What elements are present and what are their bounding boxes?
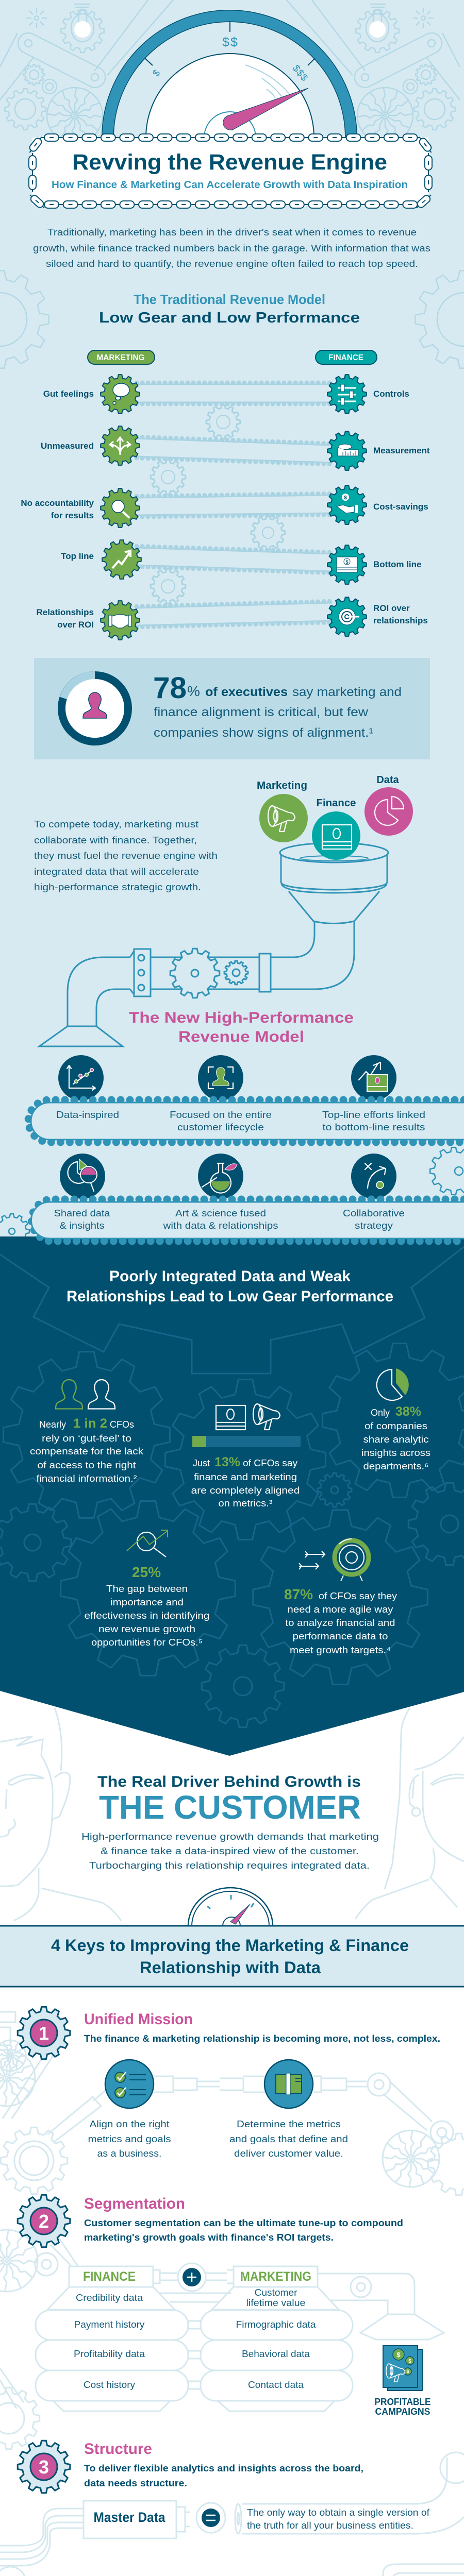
key 1: unified mission (18, 2007, 440, 2059)
icon: profitable campaigns (374, 2346, 431, 2417)
donut chart (62, 675, 128, 742)
dark section background (0, 1236, 464, 1756)
decorative gear: right edge (415, 270, 464, 368)
icon: gear target (327, 597, 367, 636)
key 2: segmentation: 2 (39, 2211, 49, 2232)
icon: customer lifecycle (198, 1055, 243, 1100)
decorative face: right (355, 1708, 464, 1919)
stat: 25% gap: new revenue growth (98, 1624, 195, 1634)
heading: the customer: The Real Driver Behind Growth is (97, 1773, 361, 1790)
icon: gear growth arrow (102, 540, 141, 579)
stat text: finance alignment is critical, but few (154, 705, 369, 719)
icon: gear tape measure (327, 431, 367, 470)
intro paragraph: growth, while finance tracked numbers back in the garage. With information that was (33, 243, 430, 253)
row labels: finance side: Cost-savings (373, 502, 428, 512)
row labels: marketing side: No accountability (21, 498, 94, 508)
stat: 1 in 2 CFOs: rely on ‘gut-feel’ to (42, 1433, 131, 1444)
row labels: finance side: Measurement (373, 446, 430, 455)
stat: 87% agile: meet growth targets.⁴ (290, 1645, 391, 1655)
row labels: finance side: Controls (373, 389, 409, 399)
row labels: finance side: ROI over (373, 603, 410, 613)
stat: 87% agile: of CFOs say they (319, 1591, 397, 1601)
icon: profitable campaigns: $ (396, 2351, 401, 2359)
conveyor 2 labels: with data & relationships (162, 1221, 278, 1231)
dark section heading: Relationships Lead to Low Gear Performance (67, 1288, 393, 1305)
title: Revving the Revenue Engine (72, 150, 387, 175)
finance column: Credibility data (76, 2293, 143, 2303)
icon: art and science (198, 1154, 243, 1199)
stat: 38% share insights: insights across (361, 1448, 430, 1458)
stat: 38% share insights (361, 1368, 430, 1471)
conveyor 1 labels: to bottom-line results (323, 1122, 425, 1132)
stat: 87% agile: need a more agile way (288, 1604, 393, 1615)
background machinery: key 1 (0, 2012, 464, 2483)
stat: 25% gap: 25% (132, 1564, 161, 1580)
marketing column (236, 2269, 317, 2390)
pill: finance (316, 350, 377, 364)
diagram: master data equals truth: the truth for all your business entities. (247, 2520, 413, 2531)
conveyor 1 labels: Top-line efforts linked (322, 1110, 425, 1120)
conveyor 2 labels: Collaborative (343, 1208, 405, 1218)
stat: 1 in 2 CFOs: CFOs (110, 1419, 134, 1430)
diagram: master data equals truth (0, 2458, 464, 2566)
decorative gear left of conveyor (0, 1214, 29, 1249)
icon: gear sliders (327, 375, 367, 414)
customer paragraph: Turbocharging this relationship requires integrated data. (89, 1860, 370, 1871)
finance column: FINANCE (83, 2269, 136, 2284)
stat: 1 in 2 CFOs: of access to the right (37, 1460, 136, 1470)
decorative wheel by key 4 (0, 2567, 26, 2576)
text: align metrics (88, 2119, 171, 2159)
icon: top-line bottom-line (351, 1055, 396, 1100)
intro paragraph (33, 227, 430, 269)
subtitle: How Finance & Marketing Can Accelerate Growth with Data Inspiration (52, 179, 408, 191)
stat: 1 in 2 CFOs: compensate for the lack (30, 1446, 144, 1456)
marketing column: lifetime value (246, 2298, 305, 2308)
conveyor 1 labels (56, 1110, 425, 1132)
key 3: structure: data needs structure. (84, 2478, 187, 2488)
stat: 25% gap: effectiveness in identifying (85, 1611, 209, 1621)
icon: gear hand with coin (327, 485, 367, 524)
small gauge (188, 1888, 273, 1926)
row labels: marketing side (21, 389, 94, 630)
pill: marketing (88, 350, 155, 364)
marketing column: Contact data (248, 2380, 304, 2390)
conveyor 1 labels: Focused on the entire (170, 1110, 272, 1120)
icon: profitable campaigns: $ (408, 2359, 411, 2364)
finance column: Cost history (84, 2380, 135, 2390)
row labels: marketing side: Relationships (37, 607, 94, 617)
row labels: finance side: Bottom line (373, 560, 422, 569)
key 1: unified mission: Unified Mission (84, 2011, 193, 2028)
funnel and pipe (39, 843, 388, 1046)
icon: gear split arrows (101, 426, 140, 465)
icon: gear magnifier (101, 488, 140, 528)
finance column: Profitability data (74, 2349, 145, 2359)
row labels: finance side (373, 389, 430, 625)
icon: finance ball (312, 798, 360, 860)
intro paragraph: Traditionally, marketing has been in the driver's seat when it comes to revenue (47, 227, 417, 238)
diagram: master data equals truth: The only way to obtain a single version of (247, 2507, 430, 2518)
heading: the customer (97, 1773, 361, 1826)
stat: 38% share insights: 38% (395, 1404, 421, 1419)
plus sign (178, 2263, 206, 2291)
icon: profitable campaigns: PROFITABLE (374, 2397, 431, 2407)
marketing column: Behavioral data (242, 2349, 310, 2359)
speedometer gauge: $ (151, 67, 163, 79)
key 2: segmentation: Customer segmentation can be the ultimate tune-up to compound (84, 2218, 403, 2228)
key 2: segmentation: Segmentation (84, 2195, 185, 2212)
panel: 4 keys band: 4 Keys to Improving the Marketing & Finance (51, 1936, 409, 1955)
conveyor 2 labels (54, 1208, 405, 1231)
marketing column: Customer (255, 2287, 297, 2298)
stat text: 78 (153, 671, 187, 705)
key 3: structure: Structure (84, 2441, 152, 2458)
stat: 87% agile (284, 1539, 397, 1655)
dashboard: advanced analytics (279, 2564, 464, 2576)
text: determine metrics: deliver customer value. (234, 2148, 343, 2159)
key 1: unified mission: 1 (39, 2023, 49, 2044)
collaborate paragraph: they must fuel the revenue engine with (34, 851, 218, 861)
conveyor 1 labels: customer lifecycle (177, 1122, 264, 1132)
heading: new high-performance model: The New High-Performance (129, 1009, 354, 1026)
speedometer gauge: $$ (222, 35, 239, 49)
collaborate paragraph: collaborate with finance. Together, (34, 835, 197, 845)
icon: gear cash (327, 545, 367, 584)
stat text: % (187, 683, 200, 699)
collaborate paragraph: To compete today, marketing must (34, 819, 198, 829)
icon: gear hand with coin: $ (344, 495, 347, 501)
icon: profitable campaigns: $ (406, 2369, 409, 2374)
customer paragraph: High-performance revenue growth demands that marketing (81, 1832, 379, 1842)
dark section heading: Poorly Integrated Data and Weak (109, 1268, 351, 1285)
stat: 87% agile: to analyze financial and (286, 1618, 395, 1628)
icon: data ball: Data (376, 774, 400, 786)
stat: 13% aligned (191, 1404, 301, 1509)
stat text: say marketing and (292, 685, 402, 699)
stat: 13% aligned: are completely aligned (191, 1485, 300, 1496)
diagram: master data equals truth: Master Data (94, 2510, 165, 2525)
heading: new high-performance model: Revenue Model (178, 1028, 304, 1045)
text: align metrics: Align on the right (90, 2119, 169, 2129)
belts between marketing and finance gears (137, 383, 333, 627)
decorative gear: left edge (0, 270, 49, 368)
row labels: marketing side: for results (51, 511, 94, 520)
icon: finance ball: Finance (317, 798, 356, 809)
decorative machinery: right (287, 0, 460, 143)
conveyor 1 labels: Data-inspired (56, 1110, 119, 1120)
icon: gear cash: $ (345, 560, 349, 565)
icon: marketing ball: Marketing (257, 780, 307, 791)
conveyor 2 labels: & insights (60, 1221, 104, 1231)
stat: 87% agile: performance data to (293, 1631, 388, 1641)
stat: 38% share insights: departments.⁶ (363, 1461, 429, 1471)
stat text: of executives (205, 685, 288, 699)
stat: 13% aligned: Just (193, 1458, 210, 1468)
icon: playbook (264, 2060, 313, 2108)
stat text: companies show signs of alignment.¹ (154, 726, 373, 740)
stat: 1 in 2 CFOs: 1 in 2 (73, 1416, 107, 1431)
conveyor 2 (31, 1199, 464, 1241)
panel: 4 keys band: Relationship with Data (140, 1958, 321, 1977)
icon: shared data (60, 1154, 105, 1199)
idle gears between belts (151, 405, 285, 604)
diagram: finance plus marketing data machine (36, 2263, 444, 2417)
panel: 4 keys band (0, 1926, 464, 1987)
stat: 1 in 2 CFOs: financial information.² (36, 1473, 137, 1484)
heading: traditional revenue model: The Traditional Revenue Model (134, 292, 325, 307)
stat: 25% gap (85, 1530, 209, 1648)
customer paragraph (81, 1832, 379, 1871)
key 2: segmentation (18, 2195, 403, 2247)
collaborate paragraph (34, 819, 218, 892)
finance column: Payment history (74, 2319, 144, 2330)
stat: 13% aligned: 13% (214, 1455, 240, 1469)
key 2: segmentation: marketing's growth goals with finance's ROI targets. (84, 2232, 334, 2243)
stat: 13% aligned: of CFOs say (243, 1458, 297, 1468)
icon: marketing ball (257, 780, 308, 842)
intro paragraph: siloed and hard to quantify, the revenue engine often failed to reach top speed. (46, 259, 418, 269)
icon: gear handshake (101, 601, 140, 640)
key 3: structure: 3 (39, 2456, 49, 2478)
stat: 25% gap: opportunities for CFOs.⁵ (91, 1637, 203, 1648)
stat: 25% gap: The gap between (106, 1584, 188, 1594)
stat: 13% aligned: on metrics.³ (219, 1498, 272, 1509)
key 3: structure (18, 2441, 363, 2493)
finance column (74, 2269, 145, 2390)
customer paragraph: & finance take a data-inspired view of the customer. (101, 1846, 359, 1856)
stat: 38% share insights: share analytic (363, 1434, 429, 1445)
icon: profitable campaigns: CAMPAIGNS (375, 2406, 430, 2417)
stat: 1 in 2 CFOs: Nearly (39, 1419, 66, 1430)
text: align metrics: as a business. (97, 2148, 162, 2159)
decorative face: left (0, 1708, 121, 1921)
conveyor 2 labels: Art & science fused (175, 1208, 266, 1218)
key 1: unified mission: The finance & marketing relationship is becoming more, not less, complex. (84, 2033, 440, 2044)
collaborate paragraph: integrated data that will accelerate (34, 867, 199, 877)
icon: collaborative strategy (351, 1154, 396, 1199)
decorative gear right of conveyor (430, 1147, 464, 1195)
heading: traditional revenue model: Low Gear and Low Performance (99, 310, 360, 326)
stat text (153, 671, 402, 740)
page background: light top section (0, 0, 464, 1247)
collaborate paragraph: high-performance strategic growth. (34, 882, 201, 892)
row labels: marketing side: Top line (61, 551, 94, 561)
stat: 38% share insights: Only (371, 1408, 390, 1418)
conveyor 2 labels: Shared data (54, 1208, 111, 1218)
key 3: structure: To deliver flexible analytics and insights across the board, (84, 2463, 363, 2473)
dark section heading (67, 1268, 393, 1305)
row labels: marketing side: Unmeasured (41, 441, 94, 451)
pill: marketing: MARKETING (97, 353, 144, 362)
row labels: marketing side: over ROI (57, 620, 94, 630)
title plate with chain border (27, 134, 434, 211)
heading: traditional revenue model (99, 292, 360, 326)
row labels: finance side: relationships (373, 616, 428, 625)
conveyor 2 labels: strategy (355, 1221, 393, 1231)
row labels: marketing side: Gut feelings (43, 389, 94, 399)
conveyor 1 (28, 1100, 464, 1142)
stat: 25% gap: importance and (110, 1597, 184, 1607)
stat: 87% agile: 87% (284, 1586, 313, 1602)
text: align metrics: metrics and goals (88, 2134, 171, 2144)
marketing column: Firmographic data (236, 2319, 317, 2330)
ghost gears on dark section (0, 1247, 464, 1727)
icon: checklist (105, 2060, 154, 2108)
pill: finance: FINANCE (328, 353, 363, 362)
heading: the customer: THE CUSTOMER (99, 1789, 361, 1826)
text: determine metrics: Determine the metrics (237, 2119, 341, 2129)
speedometer gauge (108, 16, 351, 138)
stat: 38% share insights: of companies (364, 1421, 427, 1431)
speedometer gauge: $$$ (290, 63, 310, 84)
marketing column: MARKETING (240, 2269, 311, 2284)
icon: gear thought bubble (101, 375, 140, 414)
panel: 78% stat (34, 658, 430, 759)
text: determine metrics (229, 2119, 348, 2159)
machine outlines (36, 2266, 444, 2411)
icon: data-inspired (58, 1055, 104, 1100)
text: determine metrics: and goals that define and (229, 2134, 348, 2144)
stat: 1 in 2 CFOs (30, 1380, 144, 1484)
icon: data ball (364, 774, 413, 836)
stat: 13% aligned: finance and marketing (194, 1472, 297, 1482)
heading: new high-performance model (129, 1009, 354, 1045)
decorative machinery: left (0, 0, 173, 143)
